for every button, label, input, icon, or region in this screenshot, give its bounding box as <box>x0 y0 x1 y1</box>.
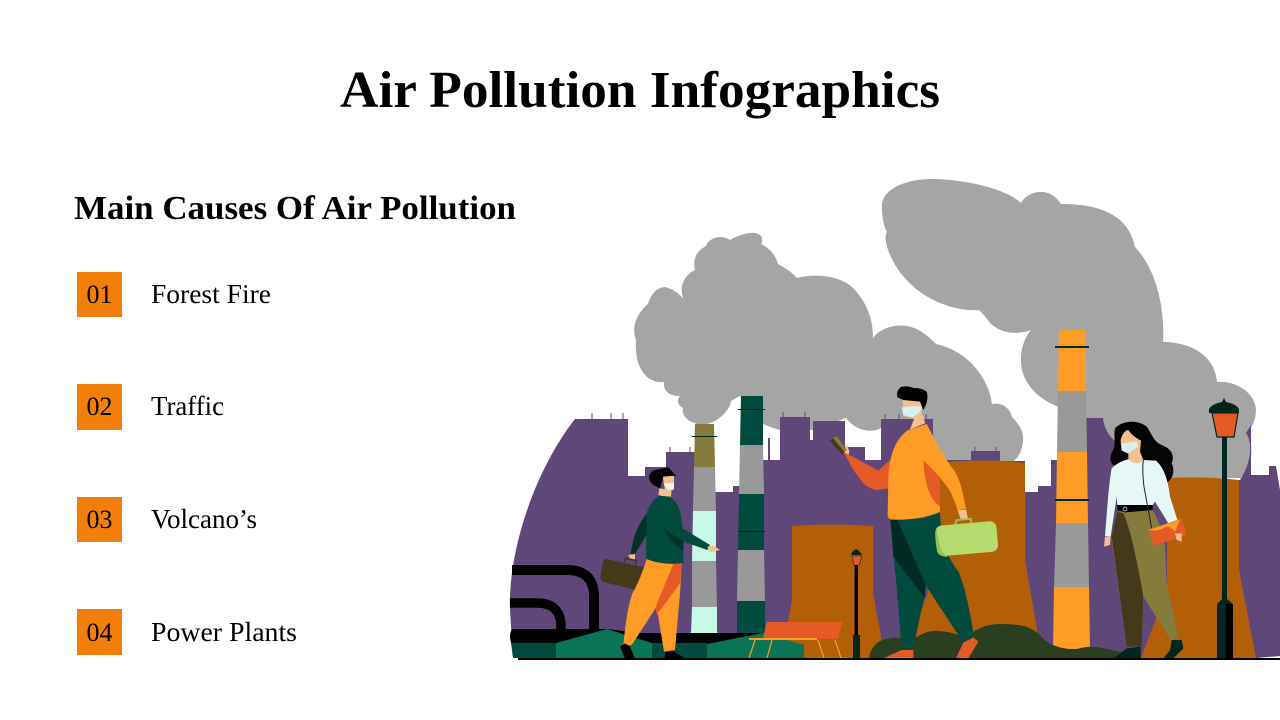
raised arm and phone <box>829 436 890 490</box>
ground blocks <box>511 629 804 658</box>
title: Air Pollution Infographics <box>340 62 940 119</box>
item 01: Forest Fire <box>151 279 271 309</box>
subheading: Main Causes Of Air Pollution <box>74 190 516 227</box>
item 01 <box>77 272 271 317</box>
person: man with briefcase <box>600 467 720 658</box>
item 02 <box>77 384 224 430</box>
bench <box>749 622 842 658</box>
ground line <box>518 658 1280 660</box>
item 04: 04 <box>86 618 112 647</box>
pipes <box>510 570 763 645</box>
smoke: right cloud <box>882 179 1256 480</box>
city skyline <box>510 417 1280 658</box>
cooling tower 1 <box>781 524 885 658</box>
smoke: left cloud <box>634 233 1023 470</box>
person: woman with bag <box>1104 422 1187 658</box>
person: man in orange sweater <box>829 386 999 658</box>
chimney 3 <box>1053 330 1090 649</box>
large street lamp <box>1209 398 1239 658</box>
item 04: Power Plants <box>151 617 297 647</box>
chimney 2 <box>737 396 765 633</box>
cooling tower 3 <box>1141 477 1256 658</box>
cooling tower 2 <box>905 460 1042 658</box>
item 02: 02 <box>86 392 112 421</box>
item 01: 01 <box>86 280 112 309</box>
illustration: polluted city <box>510 179 1280 659</box>
item 03: 03 <box>86 505 112 534</box>
item 04 <box>77 609 297 655</box>
briefcase <box>624 558 636 565</box>
panel: causes list <box>74 190 516 655</box>
chimney 1 <box>691 424 717 633</box>
skyline antennas <box>592 412 996 452</box>
bushes <box>869 624 1140 658</box>
small street lamp <box>851 549 862 658</box>
item 02: Traffic <box>151 391 224 421</box>
clutch bag <box>1148 518 1187 546</box>
item 03: Volcano’s <box>151 504 257 534</box>
item 03 <box>77 497 257 542</box>
green bag <box>935 519 999 557</box>
